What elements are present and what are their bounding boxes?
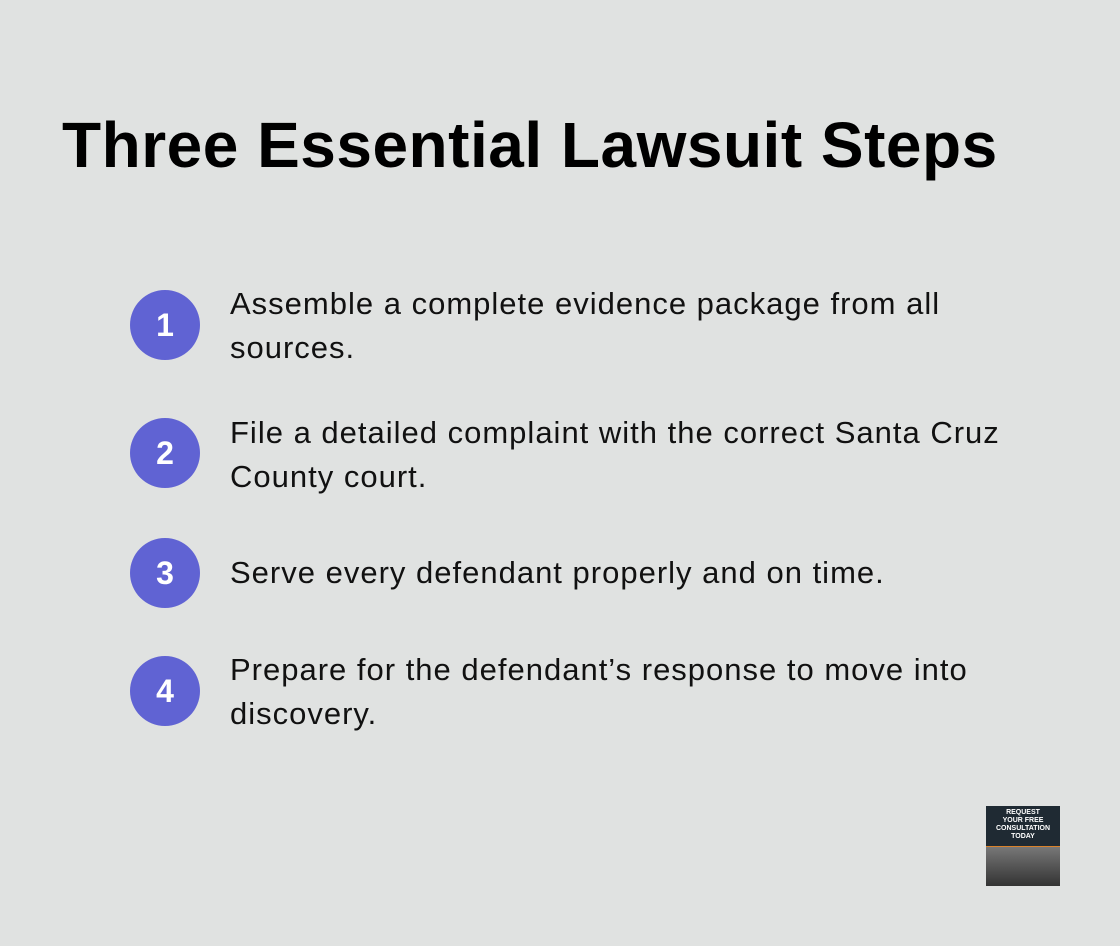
step text 2 [230,415,1000,494]
logo: consultation badge: YOUR FREE [1003,817,1043,824]
step 4 [130,652,968,731]
number circle 1 [130,290,200,360]
title: Three Essential Lawsuit Steps [62,109,998,181]
number circle 3 [130,538,200,608]
logo: consultation badge: CONSULTATION [996,825,1050,832]
step text 2: County court. [230,459,427,494]
step text 1: sources. [230,330,355,365]
number circle 4 [130,656,200,726]
step 3 [130,538,885,608]
step 1 [130,286,940,365]
step text 4: Prepare for the defendant’s response to move into [230,652,968,687]
step text 4: discovery. [230,696,377,731]
step text 3: Serve every defendant properly and on time. [230,555,885,590]
logo: consultation badge: TODAY [1011,833,1035,840]
step text 1: Assemble a complete evidence package from all [230,286,940,321]
number circle 3: 3 [156,555,174,591]
logo: consultation badge [986,806,1060,886]
number circle 2 [130,418,200,488]
logo: consultation badge: REQUEST [1006,809,1040,816]
number circle 4: 4 [156,673,174,709]
step text 2: File a detailed complaint with the correct Santa Cruz [230,415,1000,450]
step text 1 [230,286,940,365]
step 2 [130,415,1000,494]
number circle 2: 2 [156,435,174,471]
number circle 1: 1 [156,307,174,343]
step text 4 [230,652,968,731]
